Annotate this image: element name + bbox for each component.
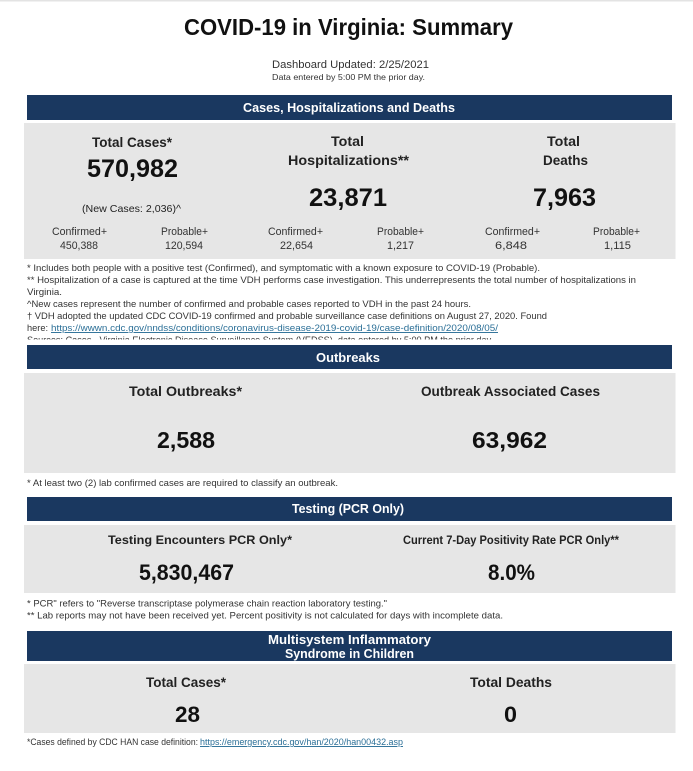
stat: MIS-C total cases: 28 bbox=[175, 702, 200, 727]
stat: total outbreaks: 2,588 bbox=[157, 427, 215, 453]
title: COVID-19 in Virginia: Summary bbox=[184, 14, 513, 40]
footnote: outbreaks: * At least two (2) lab confirmed cases are required to classify an outbreak. bbox=[27, 478, 338, 489]
stat: total deaths: Total bbox=[547, 133, 580, 149]
stat: total hospitalizations: Total bbox=[331, 133, 364, 149]
stat: positivity rate: 8.0% bbox=[488, 560, 535, 585]
panel: testing bbox=[24, 525, 676, 593]
panel: multisystem inflammatory syndrome in children bbox=[24, 664, 676, 733]
stat: total deaths: 6,848 bbox=[495, 240, 527, 252]
stat: total cases: 450,388 bbox=[60, 240, 98, 252]
stat: total deaths: 1,115 bbox=[604, 240, 631, 252]
section banner: multisystem inflammatory syndrome in children: Syndrome in Children bbox=[285, 646, 414, 661]
stat: total cases: Total Cases* bbox=[92, 134, 173, 150]
section banner: cases, hospitalizations and deaths: Cases, Hospitalizations and Deaths bbox=[243, 100, 455, 115]
section banner: multisystem inflammatory syndrome in children bbox=[27, 631, 672, 661]
stat: total hospitalizations bbox=[268, 133, 424, 252]
footnotes: cases, hospitalizations and deaths: * Includes both people with a positive test (Confirmed), and symptomatic with a known exposure to COVID-19 (Probable). bbox=[27, 263, 540, 274]
footnote: MIS-C: *Cases defined by CDC HAN case definition: bbox=[27, 737, 198, 748]
stat: MIS-C total deaths bbox=[470, 674, 552, 727]
stat: total deaths: 7,963 bbox=[533, 184, 596, 212]
stat: total cases: (New Cases: 2,036)^ bbox=[82, 203, 181, 215]
section banner: testing bbox=[27, 497, 672, 521]
section banner: outbreaks bbox=[27, 345, 672, 369]
stat: testing encounters: 5,830,467 bbox=[139, 560, 234, 585]
stat: testing encounters: Testing Encounters PCR Only* bbox=[108, 533, 292, 547]
panel: outbreaks bbox=[24, 373, 676, 473]
stat: total outbreaks bbox=[129, 383, 243, 453]
section banner: cases, hospitalizations and deaths bbox=[27, 95, 672, 120]
footnotes: cases, hospitalizations and deaths: † VDH adopted the updated CDC COVID-19 confirmed and probable surveillance case definitions on August 27, 2020. Found bbox=[27, 311, 547, 322]
stat: total cases: Confirmed+ bbox=[52, 226, 107, 238]
stat: total hospitalizations: 1,217 bbox=[387, 240, 414, 252]
stat: positivity rate: Current 7-Day Positivity Rate PCR Only** bbox=[403, 533, 619, 547]
section banner: testing: Testing (PCR Only) bbox=[292, 501, 404, 516]
stat: total hospitalizations: Hospitalizations** bbox=[288, 152, 410, 168]
update date: Data entered by 5:00 PM the prior day. bbox=[272, 72, 425, 82]
footnotes: cases, hospitalizations and deaths: Virginia. bbox=[27, 287, 62, 298]
footnotes: cases, hospitalizations and deaths: ** Hospitalization of a case is captured at the time VDH performs case investigation. This underrepresents the total number of hospitalizations in bbox=[27, 275, 636, 286]
stat: total cases: 570,982 bbox=[87, 155, 178, 183]
stat: total cases: 120,594 bbox=[165, 240, 203, 252]
stat: outbreak associated cases: 63,962 bbox=[472, 427, 547, 453]
stat: total deaths: Probable+ bbox=[593, 226, 640, 238]
panel: cases, hospitalizations and deaths bbox=[24, 123, 676, 259]
stat: total deaths: Deaths bbox=[543, 152, 588, 168]
footnotes: testing: * PCR" refers to "Reverse transcriptase polymerase chain reaction laboratory testing." bbox=[27, 598, 387, 610]
footnotes: cases, hospitalizations and deaths bbox=[27, 263, 636, 346]
stat: testing encounters bbox=[108, 533, 292, 585]
stat: MIS-C total cases: Total Cases* bbox=[146, 674, 227, 690]
stat: total hospitalizations: Probable+ bbox=[377, 226, 424, 238]
stat: total cases bbox=[52, 134, 208, 252]
stat: total deaths bbox=[485, 133, 640, 252]
footnotes: cases, hospitalizations and deaths: https://wwwn.cdc.gov/nndss/conditions/coronavirus-disease-2019-covid-19/case-definition/2020/08/05/ bbox=[51, 323, 498, 334]
stat: MIS-C total cases bbox=[146, 674, 227, 727]
stat: total outbreaks: Total Outbreaks* bbox=[129, 383, 243, 399]
footnotes: cases, hospitalizations and deaths: here: bbox=[27, 323, 48, 334]
footnotes: testing: ** Lab reports may not have been received yet. Percent positivity is not calculated for days with incomplete data. bbox=[27, 610, 503, 622]
section banner: outbreaks: Outbreaks bbox=[316, 350, 380, 365]
footnote: MIS-C bbox=[27, 737, 403, 748]
stat: total hospitalizations: 22,654 bbox=[280, 240, 313, 252]
stat: MIS-C total deaths: Total Deaths bbox=[470, 674, 552, 690]
stat: outbreak associated cases bbox=[421, 383, 600, 453]
footnote: MIS-C: https://emergency.cdc.gov/han/2020/han00432.asp bbox=[200, 737, 403, 748]
footnotes: testing bbox=[27, 598, 503, 622]
stat: total cases: Probable+ bbox=[161, 226, 208, 238]
section banner: multisystem inflammatory syndrome in children: Multisystem Inflammatory bbox=[268, 632, 432, 647]
stat: outbreak associated cases: Outbreak Associated Cases bbox=[421, 383, 600, 399]
stat: total hospitalizations: 23,871 bbox=[309, 184, 387, 212]
stat: total deaths: Confirmed+ bbox=[485, 226, 540, 238]
stat: total hospitalizations: Confirmed+ bbox=[268, 226, 323, 238]
update date: Dashboard Updated: 2/25/2021 bbox=[272, 59, 429, 71]
update date bbox=[272, 59, 429, 82]
stat: positivity rate bbox=[403, 533, 619, 585]
stat: MIS-C total deaths: 0 bbox=[504, 702, 517, 727]
footnotes: cases, hospitalizations and deaths: ^New cases represent the number of confirmed and probable cases reported to VDH in the past 24 hours. bbox=[27, 299, 471, 310]
